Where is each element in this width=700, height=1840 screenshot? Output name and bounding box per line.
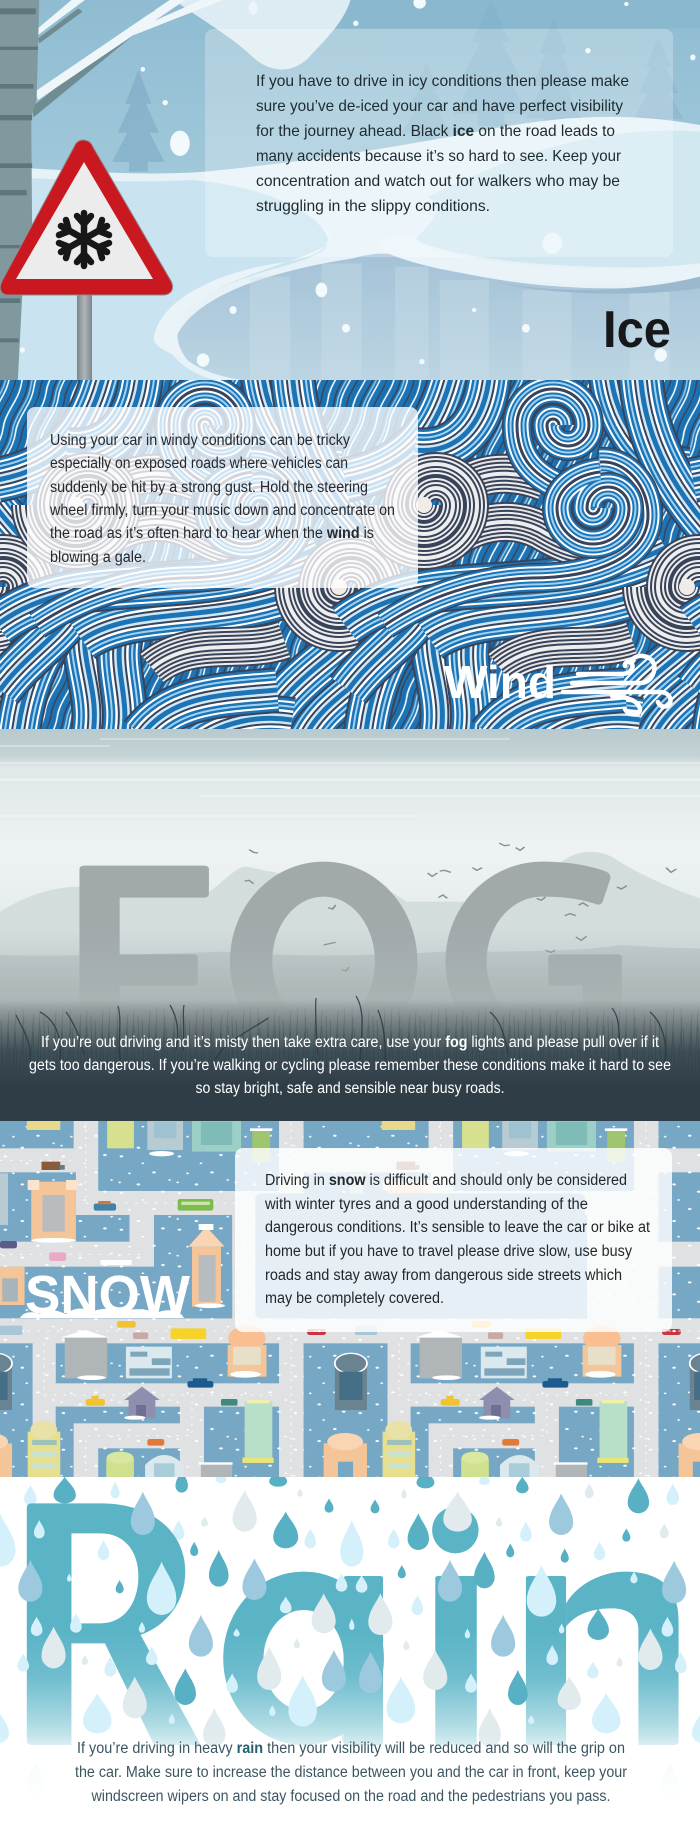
snow body text (264, 1172, 651, 1307)
heading: SNOW: SNOW (25, 1265, 190, 1325)
snow body text: roads and stay away from dangerous side streets which (265, 1267, 622, 1284)
panel: rain (0, 1477, 700, 1804)
panel: ice (0, 0, 700, 380)
ice body text: sure you’ve de-iced your car and have perfect visibility (256, 98, 623, 115)
wind body text: the road as it’s often hard to hear when the wind is (50, 525, 374, 542)
panel: wind (0, 360, 700, 745)
dark ground gradient (0, 1000, 700, 1121)
ice body text: for the journey ahead. Black ice on the road leads to (256, 123, 615, 140)
rain drops (17, 1470, 687, 1733)
wind body text: wheel firmly, turn your music down and concentrate on (49, 502, 395, 519)
panel: fog (0, 729, 700, 1121)
swirling wind pattern (0, 360, 700, 745)
ice body text: If you have to drive in icy conditions then please make (256, 73, 629, 90)
snow blob (174, 0, 350, 69)
ice body text (256, 73, 629, 215)
snow body text: Driving in snow is difficult and should only be considered (265, 1172, 627, 1189)
grass (0, 996, 700, 1070)
ice body text: struggling in the slippy conditions. (256, 198, 490, 215)
haze over letters (0, 949, 700, 1009)
snow body text: may be completely covered. (265, 1290, 444, 1307)
lake (176, 254, 700, 380)
ground (0, 117, 700, 380)
birds (245, 843, 676, 971)
wind body text: Using your car in windy conditions can be tricky (50, 432, 350, 449)
rain body text: If you’re driving in heavy rain then your visibility will be reduced and so will the grip on (77, 1740, 625, 1757)
heading: Wind: Wind (444, 656, 556, 708)
wind text box (27, 407, 418, 588)
icon: warning sign with snowflake (0, 140, 173, 380)
icon: snowflake (59, 213, 109, 266)
tree trunk and branches (0, 0, 223, 380)
falling snow (20, 0, 696, 367)
panel: snow (0, 1115, 700, 1480)
sky streaks (0, 738, 700, 781)
heading: SNOW (20, 1275, 190, 1318)
heading: FOG (80, 862, 622, 988)
foggy sky (0, 729, 700, 912)
ice body text: many accidents because it’s so hard to see. Keep your (256, 148, 622, 165)
heading: Ice: Ice (603, 301, 671, 359)
rain body text: the car. Make sure to increase the distance between you and the car in front, keep your (75, 1764, 627, 1781)
fog body text: If you’re out driving and it’s misty then take extra care, use your fog lights and please pull over if it (41, 1034, 660, 1051)
heading: Rain (27, 1503, 679, 1745)
ice scene background (0, 0, 700, 380)
city map (0, 1115, 700, 1480)
ice text box (205, 29, 673, 257)
rain body text (75, 1740, 627, 1805)
wind body text: especially on exposed roads where vehicles can (50, 455, 348, 472)
pale background drops (0, 1477, 700, 1767)
icon: wind gusts (563, 656, 671, 714)
wind body text (49, 432, 395, 566)
fog body text (29, 1034, 671, 1097)
ice body text: concentration and watch out for walkers who may be (256, 173, 620, 190)
snow body text: home but if you have to travel please drive slow, use busy (265, 1243, 632, 1260)
snow body text: with winter tyres and a good understanding of the (264, 1196, 588, 1213)
snow body text: dangerous conditions. It’s sensible to leave the car or bike at (265, 1219, 651, 1236)
fog body text: so stay bright, safe and sensible near busy roads. (196, 1080, 504, 1097)
wind body text: blowing a gale. (50, 549, 146, 566)
rain body text: windscreen wipers on and stay focused on the road and the pedestrians you pass. (91, 1788, 610, 1805)
mountains (0, 852, 700, 1001)
snow text box (235, 1148, 672, 1332)
white fade (26, 1766, 680, 1796)
wind body text: suddenly be hit by a strong gust. Hold the steering (50, 479, 368, 496)
